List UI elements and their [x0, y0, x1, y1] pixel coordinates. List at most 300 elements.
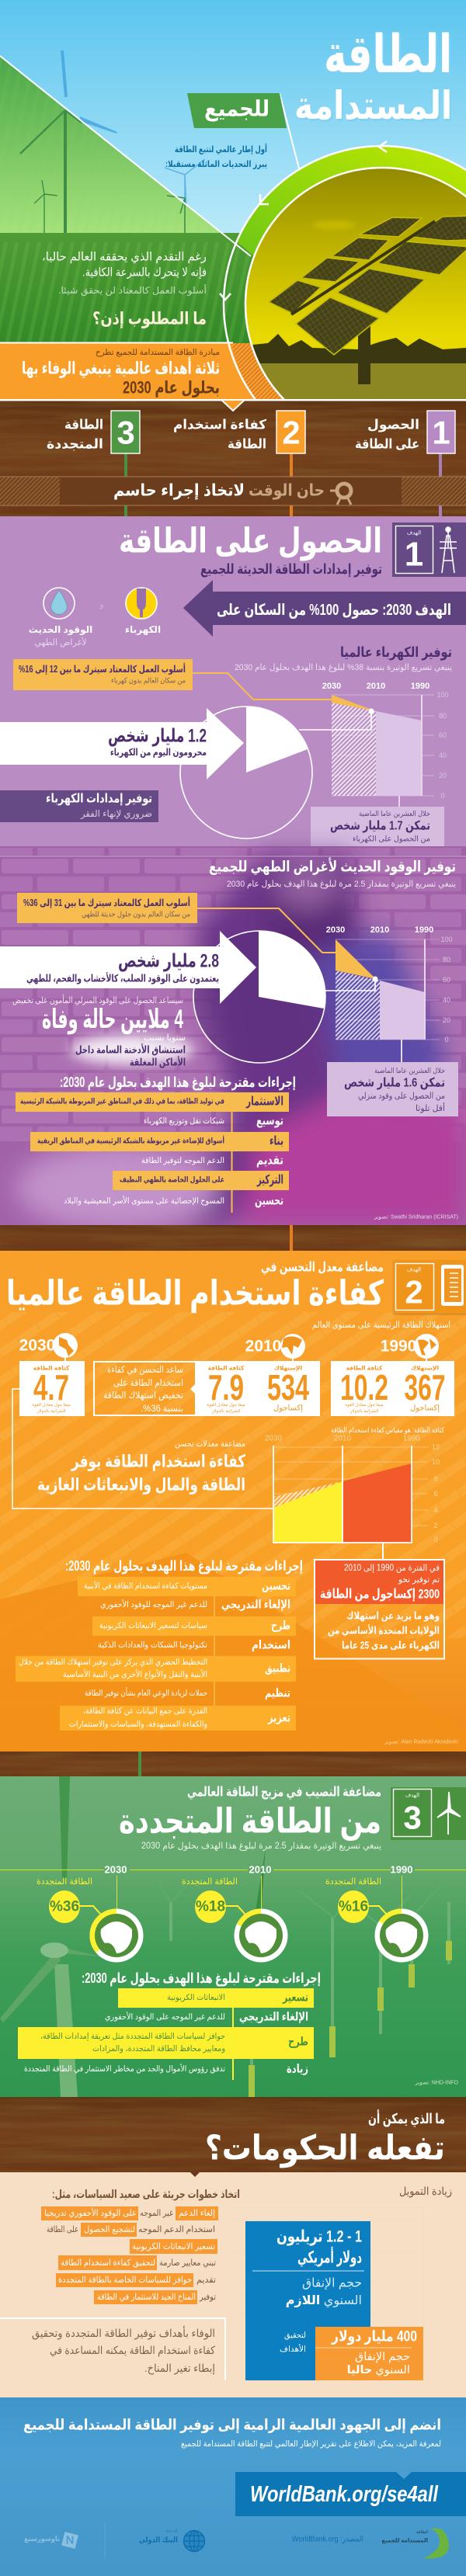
row: apply	[16, 1656, 296, 1682]
outer white arc	[222, 144, 466, 399]
globe	[53, 1333, 78, 1358]
badge text: للجميع	[204, 96, 270, 121]
row label: طرح	[271, 1620, 290, 1632]
callout line 1: خلال العشرين عاما الماضية	[359, 810, 430, 818]
clouds	[312, 220, 356, 230]
panel: goal 1 access to energy	[0, 516, 466, 849]
table spine	[214, 1577, 215, 1731]
goal 3 line	[138, 1751, 141, 1776]
panel: government action	[0, 2172, 466, 2397]
blue wrap	[311, 932, 447, 1087]
row label: التركيز	[256, 1174, 283, 1186]
callout box	[327, 1062, 458, 1116]
arrow note: محرومون اليوم من الكهرباء	[110, 747, 207, 759]
row label: تقديم	[256, 1154, 283, 1168]
woman and surroundings	[16, 854, 466, 1231]
card	[19, 1361, 85, 1416]
wood background	[0, 400, 466, 517]
required figure line 2: دولار أمريكي	[297, 2245, 362, 2267]
chip text: على الوقود الأحفوري تدريجيا	[44, 2207, 137, 2218]
row label: تحسين	[255, 1194, 283, 1208]
grid	[273, 1447, 428, 1526]
chip	[58, 2255, 157, 2270]
caption: الطاقة المتجددة	[182, 1877, 238, 1887]
photo credit: (ICRISAT) Swathi Sridharan :تصوير	[374, 1214, 458, 1220]
axis 8: 8	[433, 1475, 438, 1483]
card white part	[190, 1361, 319, 1416]
row fill	[16, 1656, 296, 1682]
chart dot	[368, 708, 374, 714]
plug circle	[126, 588, 157, 619]
policy row 5	[56, 2273, 216, 2287]
year 2010	[245, 1334, 305, 1362]
year 1990: 1990	[403, 1435, 421, 1442]
orange background	[0, 1251, 466, 1751]
green triangle	[0, 56, 223, 234]
row text: أسواق للإضاءة غير مربوطة بالشبكة الرئيسية في المناطق الريفية	[37, 1135, 224, 1146]
required note 1: حجم الإنفاق	[302, 2276, 362, 2290]
connector line	[280, 93, 299, 168]
axis 0: 0	[433, 1536, 438, 1543]
globe	[414, 1334, 439, 1359]
pie wedge	[259, 931, 325, 1009]
axis 2: 2	[433, 1522, 438, 1529]
1990 rule	[424, 939, 426, 1040]
actions table	[16, 1092, 289, 1213]
pie leader	[325, 979, 375, 991]
card	[331, 1361, 454, 1416]
N letter: N	[66, 2534, 74, 2546]
sky background	[0, 0, 466, 264]
tag panel	[391, 1787, 466, 1840]
chip	[176, 2206, 218, 2220]
icon: fuel drop	[29, 588, 92, 647]
call-to-action band	[0, 477, 466, 505]
funding chart	[231, 2207, 423, 2380]
badge shape	[187, 93, 287, 128]
hatched area	[336, 970, 380, 1040]
year 2010: 2010	[334, 1435, 352, 1442]
year: 2030	[19, 1337, 55, 1354]
funding heading: زيادة التمويل	[399, 2185, 452, 2198]
globe	[101, 1922, 132, 1953]
intro text	[165, 143, 267, 169]
consumption value: 367	[404, 1367, 446, 1408]
goal 1	[355, 411, 455, 453]
goal 1 number: 1	[432, 415, 450, 450]
pie chart: 1.2 billion	[180, 706, 374, 838]
goal 2 line	[290, 1225, 293, 1252]
callout line 3: من الحصول على وقود منزلي	[358, 1092, 445, 1101]
goal tag	[394, 1260, 466, 1314]
plain text: توفير	[199, 2293, 216, 2302]
axis 40: 40	[439, 752, 447, 759]
savings figure: 2300 إكساجول من الطاقة	[320, 1587, 440, 1602]
bubble	[338, 1890, 369, 1923]
percent: %16	[339, 1899, 368, 1915]
deaths text	[12, 994, 194, 1068]
plug label: الكهرباء	[125, 624, 161, 635]
year 1990: 1990	[415, 925, 433, 935]
row: increase	[24, 2062, 308, 2076]
meter window	[444, 1269, 461, 1302]
logo: nowsourcing	[24, 2532, 78, 2549]
goal tag	[392, 522, 466, 577]
arrow figure: 2.8 مليار شخص	[118, 950, 219, 972]
callout headline: أسلوب العمل كالمعتاد سيترك ما بين 31 إلى 36%	[23, 896, 190, 908]
meter ticks	[450, 1273, 458, 1297]
caption: الطاقة المتجددة	[37, 1877, 92, 1887]
callout line 4: أقل تلوثا	[416, 1102, 445, 1113]
intensity label: كثافة الطاقة	[346, 1365, 383, 1371]
year 2030: 2030	[265, 1435, 283, 1442]
head	[266, 870, 356, 963]
plain text: على الطاقة	[47, 2225, 78, 2234]
intensity unit line 1: ميغا جول معادل القوة	[345, 1403, 384, 1408]
row text: مستويات كفاءة استخدام الطاقة في الأبنية	[84, 1581, 207, 1591]
pie leader	[299, 711, 371, 730]
ring arrows	[220, 141, 387, 300]
field line 3: أسلوب العمل كالمعتاد لن يحقق شيئا.	[58, 284, 207, 297]
chip	[130, 2239, 217, 2254]
policy row 4	[58, 2255, 216, 2270]
connector	[367, 1906, 387, 1915]
row: price	[118, 1988, 314, 2008]
intensity unit line 1: ميغا جول معادل القوة	[207, 1403, 245, 1408]
ring white	[374, 1908, 429, 1963]
row text 1: التخطيط الحضري الذي يركز على توفير استهلاك الطاقة من خلال	[19, 1658, 207, 1667]
deaths line 5: الأماكن المغلقة	[130, 1056, 186, 1068]
tag word: الهدف	[407, 1267, 421, 1273]
goal 2	[173, 411, 305, 453]
foreground blades and towers	[0, 1776, 449, 2097]
wood grain	[0, 1225, 466, 1252]
energy intensity chart	[265, 1435, 440, 1543]
timeline	[0, 1863, 466, 1876]
presented by: قدمه	[165, 2526, 178, 2534]
row: expand	[144, 1115, 283, 1127]
row text: للدعم غير الموجه للوقود الأحفوري	[100, 1599, 207, 1609]
deaths line 3: سنويا بسبب	[144, 1033, 186, 1043]
row fill	[60, 1706, 296, 1731]
current figure: 400 مليار دولار	[331, 2329, 417, 2345]
row fill	[30, 1132, 289, 1151]
distant blades	[155, 1879, 447, 1925]
logo: sustainable energy for all	[381, 2528, 449, 2558]
row label: الإلغاء التدريجي	[239, 2011, 308, 2023]
orange divider	[315, 2347, 412, 2349]
policy row 2	[47, 2223, 215, 2237]
deaths line 4: استنشاق الأدخنة السامة داخل	[75, 1043, 186, 1056]
orange band	[0, 343, 291, 400]
row fill	[18, 2027, 314, 2059]
row label: طرح	[288, 2036, 308, 2048]
chart dot	[373, 977, 377, 981]
actions table	[16, 1577, 296, 1731]
tag word: الهدف	[407, 531, 421, 536]
band line 1: مبادرة الطاقة المستدامة للجميع تطرح	[96, 348, 220, 357]
row label: تحسين	[262, 1579, 290, 1593]
note line 3: إبطاء تغير المناخ.	[144, 2362, 215, 2375]
goal title: الحصول على الطاقة	[119, 522, 382, 561]
box notch	[396, 2472, 412, 2479]
icon: pylon	[440, 527, 457, 573]
arrow shape	[0, 931, 256, 1004]
row text: حملات لزيادة الوعي العام بشأن توفير الطاقة	[85, 1687, 207, 1698]
card frame	[94, 1362, 319, 1415]
goal 1 label line 2: على الطاقة	[355, 436, 419, 452]
row: build	[30, 1132, 289, 1151]
drop line	[261, 1876, 263, 1910]
plain text: استخدام الدعم الموجه	[138, 2225, 215, 2234]
logo text 1: الطاقة	[416, 2530, 428, 2535]
callout box	[17, 893, 197, 923]
conjunction: و	[99, 600, 104, 609]
white frame	[315, 1560, 444, 1658]
row: strengthen	[60, 1706, 296, 1731]
callout: 1.7 billion	[311, 807, 444, 846]
connector	[78, 1906, 101, 1915]
pie circle	[193, 931, 325, 1063]
big arrow: 2.8 billion	[0, 931, 256, 1004]
row: provide	[141, 1154, 283, 1168]
row text: الانبعاثات الكربونية	[167, 1993, 225, 2002]
tree line	[245, 334, 466, 365]
axis labels	[440, 936, 453, 1043]
row: focus	[113, 1171, 289, 1190]
pie chart: 2.8 billion	[193, 931, 377, 1063]
wood	[0, 2097, 466, 2172]
head highlight	[276, 862, 338, 908]
pointer	[190, 2172, 200, 2177]
solar panels	[269, 216, 466, 355]
other towers	[171, 1902, 449, 2097]
deaths intro: سيساعد الحصول على الوقود المنزلي المأمون على تخفيض	[12, 994, 183, 1005]
wood grain	[0, 2097, 466, 2172]
callout line 3: من الحصول على الكهرباء	[353, 835, 430, 843]
consumption label: الإستهلاك	[274, 1365, 302, 1371]
row label: الإلغاء التدريجي	[221, 1598, 290, 1612]
actions heading: إجراءات مقترحة لبلوغ هذا الهدف بحلول عام 2030:	[65, 1558, 303, 1574]
row text 1: حوافز لسياسات الطاقة المتجددة مثل تعريفة إمدادات الطاقة،	[40, 2032, 225, 2041]
stem to savings box	[382, 1543, 384, 1559]
row fill	[113, 1171, 289, 1190]
row fill	[92, 1616, 296, 1636]
yellow area	[273, 1481, 343, 1543]
cooking fuel chart	[326, 925, 453, 1043]
message kicker: مضاعفة معدلات تحسن	[175, 1439, 245, 1449]
purple photo base	[0, 846, 466, 1226]
caption: الطاقة المتجددة	[325, 1877, 381, 1887]
box: ending poverty	[0, 790, 158, 822]
tag number: 2	[405, 1273, 423, 1311]
row text: المسوح الإحصائية على مستوى الأسر المعيشية والبلاد	[64, 1196, 224, 1206]
photo credit: NHD-INFO :تصوير	[414, 2081, 459, 2085]
note line 3: تخفيض استهلاك الطاقة	[103, 1390, 183, 1401]
grid	[336, 939, 440, 1040]
bank name: البنك الدولي	[139, 2536, 178, 2545]
goal line colours	[124, 453, 442, 517]
band line 3: بحلول عام 2030	[123, 377, 220, 398]
bubble	[49, 1890, 80, 1923]
band centre	[60, 477, 402, 505]
panel: what governments can do header	[0, 2097, 466, 2172]
axis 60: 60	[439, 731, 447, 739]
policy row 6	[94, 2290, 216, 2304]
distant turbine	[165, 159, 205, 233]
goal kicker: مضاعفة النصيب في مزيج الطاقة العالمي	[187, 1784, 381, 1800]
chip	[41, 2206, 138, 2220]
yellow wedge	[332, 695, 376, 711]
row label: تنظيم	[265, 1686, 290, 1700]
goal subtitle: توفير إمدادات الطاقة الحديثة للجميع	[200, 561, 382, 578]
arrow note: يعتمدون على الوقود الصلب، كالأخشاب والفحم، للطهي	[26, 972, 219, 984]
panel spine	[291, 221, 435, 314]
globe	[183, 2531, 205, 2551]
icon: efficiency meter	[441, 1265, 464, 1306]
row: phase out	[105, 2011, 308, 2023]
callout leader	[197, 908, 336, 953]
savings line 4: وهو ما يزيد عن استهلاك	[346, 1610, 440, 1621]
background wind turbine blades	[61, 50, 117, 134]
tag panel	[394, 1260, 466, 1314]
row label: زيادة	[287, 2062, 308, 2076]
row text: شبكات نقل وتوزيع الكهرباء	[144, 1116, 224, 1126]
policy row 3	[130, 2239, 217, 2254]
axis 10: 10	[432, 1458, 440, 1466]
chip	[94, 2290, 197, 2304]
actions heading: إجراءات مقترحة لبلوغ هذا الهدف بحلول عام 2030:	[82, 1970, 321, 1987]
row label: تطبيق	[265, 1661, 290, 1675]
panel: goal 2 energy efficiency	[0, 1251, 466, 1751]
note line 4: بنسبة 36%.	[141, 1403, 183, 1414]
message line 1: كفاءة استخدام الطاقة يوفر	[71, 1452, 245, 1472]
year rules	[273, 1446, 412, 1543]
tag box	[396, 526, 433, 573]
chip text: المناخ الجيد للاستثمار في الطاقة	[97, 2293, 196, 2302]
row: improve	[64, 1194, 283, 1208]
panel: hero	[0, 0, 466, 399]
data card 1990	[331, 1361, 454, 1416]
goal 2 label line 2: الطاقة	[228, 436, 266, 452]
callout line 1: خلال العشرين عاما الماضية	[374, 1067, 445, 1074]
photo sky	[246, 168, 466, 349]
plug glyph	[137, 588, 146, 617]
line goal 3	[124, 453, 127, 517]
year: 1990	[381, 1337, 416, 1356]
intensity label: كثافة الطاقة	[33, 1365, 70, 1371]
row text: سياسات لتسعير الانبعاثات الكربونية	[99, 1621, 207, 1630]
year 2030: 2030	[326, 925, 345, 935]
callout: business as usual fuel	[17, 893, 197, 923]
tag number: 3	[403, 1800, 422, 1835]
hatched wedge	[273, 1481, 343, 1508]
row fill	[16, 1092, 289, 1112]
year 2010: 2010	[367, 682, 385, 691]
paper background	[0, 2172, 466, 2397]
actions table	[18, 1988, 314, 2080]
red header	[315, 1560, 444, 1604]
axis 20: 20	[439, 772, 447, 779]
year 1990	[381, 1334, 439, 1362]
logo: world bank	[139, 2526, 205, 2551]
chip	[81, 2223, 137, 2237]
row label: الاستثمار	[245, 1095, 283, 1109]
callout note: من سكان العالم بدون حلول حديثة للطهي	[82, 910, 190, 919]
section rule	[0, 856, 466, 857]
wood	[0, 1225, 466, 1252]
callout: 1.6 billion	[327, 1062, 458, 1116]
goal 2 number: 2	[282, 415, 301, 450]
chart sub-heading: ينبغي تسريع الوتيرة بنسبة 38% لبلوغ هذا الهدف بحلول عام 2030	[235, 663, 452, 672]
row text 2: والكفاءة المستهدفة، والسياسات والاستثمارات	[69, 1720, 207, 1729]
consumption value: 534	[267, 1367, 309, 1408]
intensity unit line 2: الشرائية بالدولار	[211, 1409, 241, 1414]
goal 3 box	[111, 411, 140, 453]
blue divider	[252, 2270, 364, 2272]
note line 1: ساعد التحسن في كفاءة	[107, 1364, 183, 1376]
orange band text	[22, 348, 220, 398]
table spine	[232, 1988, 234, 2080]
crescent shape	[423, 2528, 449, 2558]
goal tag	[391, 1787, 466, 1840]
row: use	[98, 1638, 290, 1652]
chip text: حوافز للسياسات الخاصة بالطاقة المتجددة	[58, 2276, 192, 2285]
dark figure	[186, 854, 435, 1225]
row: launch	[18, 2027, 314, 2059]
goals note 2: الأهداف	[280, 2344, 306, 2354]
URL box	[235, 2472, 466, 2516]
intensity value: 10.2	[340, 1367, 388, 1408]
orange block	[315, 2327, 423, 2380]
row text: الدعم الموجه لتوفير الطاقة	[141, 1156, 224, 1165]
axis 4: 4	[433, 1506, 438, 1514]
wood	[0, 1751, 466, 1776]
ring white	[90, 1908, 143, 1963]
title	[294, 25, 452, 127]
crop rows	[0, 242, 264, 343]
stem	[398, 796, 400, 807]
intensity unit line 1: ميغا جول معادل القوة	[32, 1403, 71, 1408]
timeline rule	[0, 1870, 466, 1871]
continents	[418, 1338, 436, 1356]
field line 1: رغم التقدم الذي يحققه العالم حاليا،	[42, 250, 207, 264]
share 2010	[182, 1876, 293, 1967]
globe	[280, 1334, 305, 1359]
band text white: لاتخاذ إجراء حاسم	[113, 481, 245, 500]
pointer	[221, 400, 245, 411]
year 2030: 2030	[105, 1863, 127, 1876]
blue block	[245, 2221, 370, 2380]
axis 6: 6	[433, 1490, 438, 1498]
row text 2: الأبنية والنقل والأنواع الأخرى من البنية الأساسية	[63, 1669, 207, 1679]
wood divider 1	[0, 1225, 466, 1252]
row label: تسعير	[282, 1991, 308, 2005]
climate note	[0, 2318, 225, 2380]
callout headline: أسلوب العمل كالمعتاد سيترك ما بين 12 إلى 16%	[19, 662, 186, 675]
required note 2: السنوي اللازم	[286, 2293, 362, 2307]
grid	[332, 695, 434, 796]
pot	[16, 1145, 217, 1231]
field text block	[42, 250, 207, 329]
red area	[343, 1463, 412, 1543]
ring share	[229, 1904, 293, 1967]
callout: 1.6 billion stem	[401, 1040, 402, 1062]
lower field	[0, 1553, 466, 1751]
1990 rule	[421, 695, 423, 796]
light area	[380, 981, 425, 1040]
row text 1: القدرة على جمع البيانات عن كثافة الطاقة،	[83, 1706, 207, 1716]
